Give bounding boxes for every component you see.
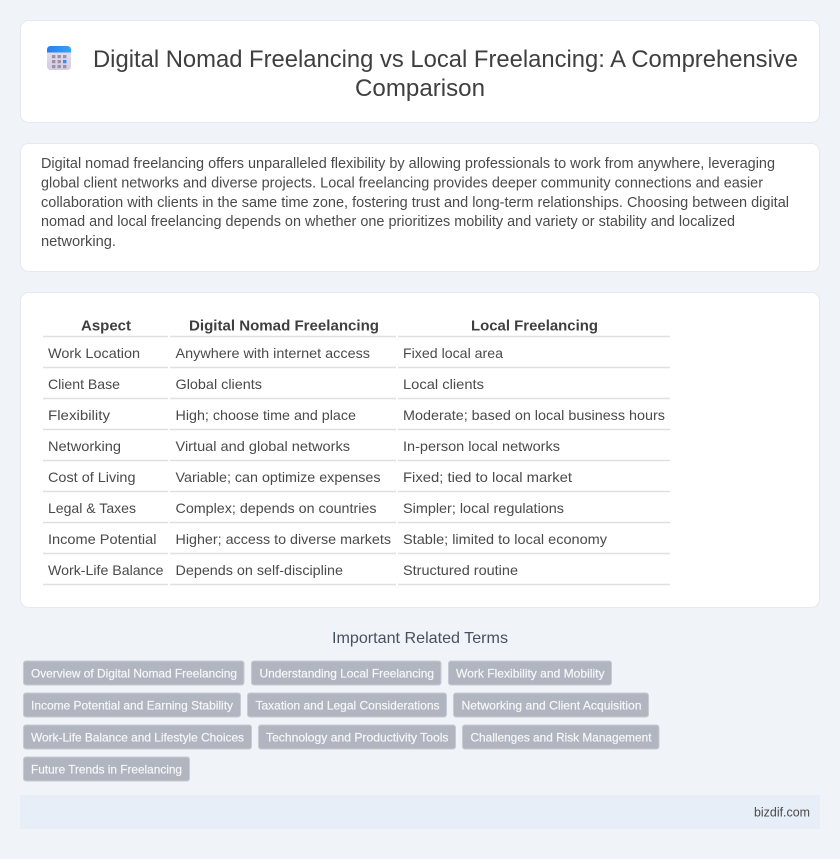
row: income potential [48,531,607,547]
panel: introduction text: Digital nomad freelancing offers unparalleled flexibility by allowing professionals to work from anywhere, leveraging [41,156,775,172]
tag [24,757,190,781]
row: legal and taxes [48,500,564,516]
table header row [81,318,598,334]
row: flexibility: Flexibility [48,407,110,423]
tag [448,661,612,685]
row: legal and taxes: Legal & Taxes [48,500,136,516]
tag [454,693,648,717]
heading: important related terms: Important Related Terms [332,630,508,647]
panel: introduction text: global client networks and diverse projects. Local freelancing provides deeper community connections and easier [41,176,763,192]
tag: Work-Life Balance and Lifestyle Choices [31,730,244,744]
footer: bizdif.com [754,806,810,820]
tag: Future Trends in Freelancing [31,762,182,776]
row: work location: Fixed local area [403,345,503,361]
tag [24,693,240,717]
related term tags [24,661,659,781]
row: flexibility [48,407,665,423]
row: cost of living: Variable; can optimize expenses [176,469,380,485]
tag [248,693,446,717]
tag [258,725,456,749]
panel: introduction text: collaboration with clients in the same time zone, fostering trust and long-term relationships. Choosing between digital [41,195,789,211]
tag [24,661,244,685]
title [93,46,798,102]
tag: Challenges and Risk Management [470,730,652,744]
row: legal and taxes: Complex; depends on countries [176,500,376,516]
row: client base [48,376,484,392]
tag: Understanding Local Freelancing [260,666,434,680]
row: cost of living: Cost of Living [48,469,136,485]
footer [20,795,820,829]
row: income potential: Income Potential [48,531,156,547]
panel: comparison table [20,292,820,608]
tag [252,661,441,685]
tag [24,725,252,749]
row: income potential: Stable; limited to local economy [403,531,607,547]
row: work-life balance: Work-Life Balance [48,562,164,578]
row: networking: In-person local networks [403,438,560,454]
tag: Technology and Productivity Tools [266,730,448,744]
panel: introduction text: nomad and local freelancing depends on whether one prioritizes mobility and variety or stability and localized [41,214,735,230]
row: flexibility: High; choose time and place [176,407,356,423]
row: work location [48,345,503,361]
title: Comparison [355,75,485,102]
panel: introduction text [20,144,820,272]
table header row: Digital Nomad Freelancing [189,318,379,334]
tag: Taxation and Legal Considerations [256,698,440,712]
row: flexibility: Moderate; based on local business hours [403,407,665,423]
tag: Overview of Digital Nomad Freelancing [31,666,237,680]
row: networking [48,438,560,454]
row: client base: Client Base [48,376,120,392]
row: work-life balance: Depends on self-discipline [176,562,343,578]
row: work location: Work Location [48,345,140,361]
row: income potential: Higher; access to diverse markets [176,531,391,547]
tag: Networking and Client Acquisition [462,698,642,712]
panel: introduction text: networking. [41,234,116,250]
title: Digital Nomad Freelancing vs Local Freelancing: A Comprehensive [93,46,798,73]
panel: title header [20,20,820,122]
row: work-life balance [48,562,518,578]
table header row: Local Freelancing [471,318,598,334]
row: work location: Anywhere with internet access [176,345,370,361]
row: cost of living: Fixed; tied to local market [403,469,572,485]
row: networking: Networking [48,438,121,454]
row: client base: Global clients [176,376,262,392]
tag [462,725,659,749]
tag: Income Potential and Earning Stability [31,698,233,712]
row: cost of living [48,469,572,485]
table header row: Aspect [81,318,131,334]
icon: calendar [47,46,71,70]
row: client base: Local clients [403,376,484,392]
row: legal and taxes: Simpler; local regulations [403,500,564,516]
row: networking: Virtual and global networks [176,438,350,454]
tag: Work Flexibility and Mobility [456,666,604,680]
row: work-life balance: Structured routine [403,562,518,578]
